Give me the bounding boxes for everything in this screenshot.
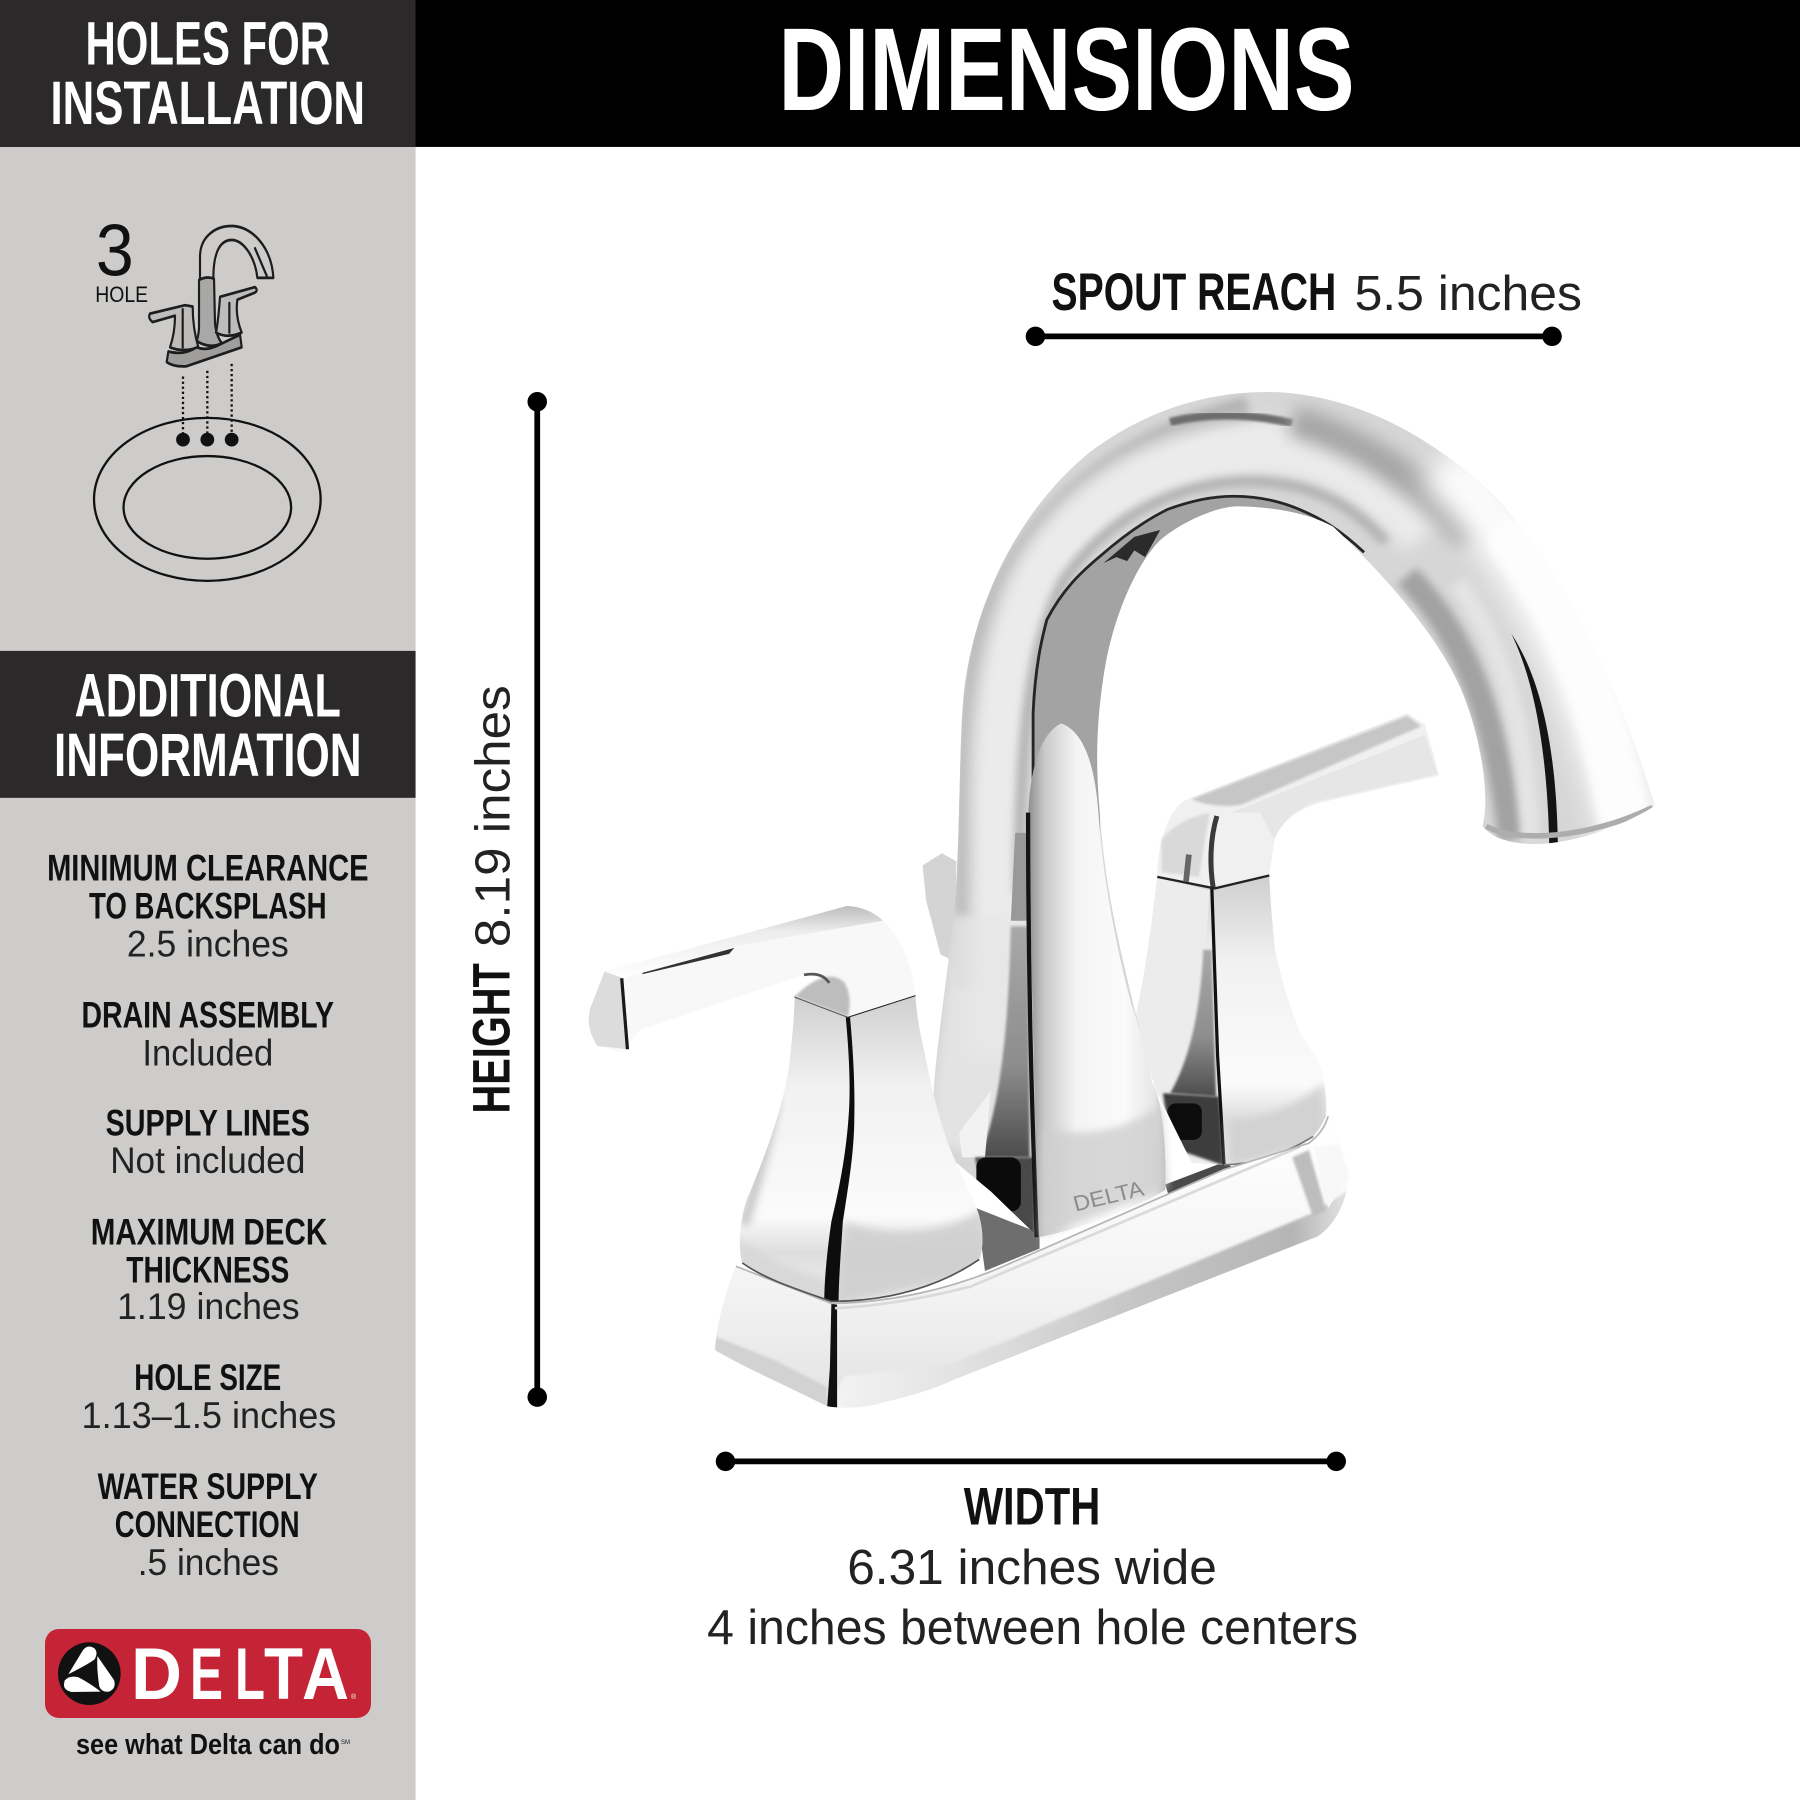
bright outer side of spout end <box>1443 461 1637 853</box>
center teardrop front <box>1028 723 1165 1237</box>
logo wordmark: D <box>131 1634 182 1715</box>
header bar: dimensions <box>0 0 1800 147</box>
dimension: width: 6.31 inches wide <box>847 1540 1217 1595</box>
logo wordmark <box>131 1634 349 1715</box>
spec: maximum deck thickness: 1.19 inches <box>117 1286 300 1327</box>
logo wordmark: T <box>264 1634 303 1715</box>
dimension: width: WIDTH <box>964 1477 1100 1536</box>
heading: holes for installation: HOLES FOR <box>86 9 330 77</box>
deck base plate <box>711 1116 1357 1414</box>
logo wordmark: A <box>302 1634 349 1715</box>
top streak <box>1170 415 1292 423</box>
grey shadow beside the dark curve <box>1019 481 1386 894</box>
back lever behind the spout <box>923 853 956 961</box>
title: DIMENSIONS: DIMENSIONS <box>778 4 1355 136</box>
logo emblem <box>58 1642 121 1705</box>
icon: faucet line drawing <box>149 226 273 366</box>
logo red badge <box>45 1629 371 1718</box>
spec: water supply connection: .5 inches <box>138 1542 279 1583</box>
spec: maximum deck thickness: THICKNESS <box>126 1249 289 1290</box>
dark reflection line on spout end <box>1511 633 1558 845</box>
spec: supply lines <box>106 1102 310 1181</box>
dimension: width: 4 inches between hole centers <box>707 1600 1358 1655</box>
engraved DELTA mark: DELTA <box>1070 1176 1146 1216</box>
logo wordmark: L <box>235 1634 265 1715</box>
three mounting holes <box>176 433 239 447</box>
spec: maximum deck thickness: MAXIMUM DECK <box>91 1211 328 1252</box>
spec: hole size <box>82 1357 336 1436</box>
right lever <box>1157 713 1439 888</box>
tagline: see what Delta can do <box>76 1729 340 1761</box>
label: 3 hole: HOLE <box>95 282 148 307</box>
sink basin <box>94 418 321 581</box>
dimension: height: HEIGHT <box>463 963 522 1114</box>
left lever <box>589 906 915 1053</box>
outer darker band of the tube <box>971 410 1249 988</box>
registered mark: ® <box>351 1693 357 1701</box>
label: 3 hole: 3 <box>96 209 134 292</box>
dimension: height: 8.19 inches <box>466 685 521 947</box>
wide highlight along the tube <box>998 448 1429 1056</box>
grey band under the arch <box>1034 498 1334 831</box>
spec: drain assembly: Included <box>142 1032 273 1073</box>
Delta logo <box>45 1629 371 1761</box>
spec: minimum clearance: MINIMUM CLEARANCE <box>47 847 368 888</box>
spec: hole size: 1.13–1.5 inches <box>82 1395 336 1436</box>
dimension: height <box>463 392 547 1407</box>
chrome faucet illustration <box>589 392 1655 1414</box>
spec: supply lines: SUPPLY LINES <box>106 1102 310 1143</box>
heading: holes for installation: INSTALLATION <box>51 69 365 137</box>
dimension: spout reach: SPOUT REACH <box>1052 263 1336 322</box>
heading: additional information: ADDITIONAL <box>75 661 341 729</box>
spec: minimum clearance <box>47 847 368 964</box>
main column and arched spout <box>933 392 1655 1237</box>
spec: drain assembly: DRAIN ASSEMBLY <box>82 994 334 1035</box>
spec: water supply connection: WATER SUPPLY <box>98 1466 318 1507</box>
spec: supply lines: Not included <box>110 1140 305 1181</box>
dimension: spout reach: 5.5 inches <box>1355 266 1582 321</box>
left body under the tube <box>936 912 1001 1149</box>
heading: holes for installation <box>0 0 416 147</box>
left handle body <box>739 995 988 1306</box>
heading: additional information <box>0 651 416 798</box>
dimension: width <box>707 1452 1358 1655</box>
spec: water supply connection <box>98 1466 318 1583</box>
spec: hole size: HOLE SIZE <box>134 1357 281 1398</box>
spec: drain assembly <box>82 994 334 1073</box>
right handle body <box>1134 876 1326 1168</box>
icon: 3 hole faucet over sink <box>94 209 321 581</box>
dimension: spout reach <box>1026 263 1582 346</box>
spec: minimum clearance: 2.5 inches <box>127 923 289 964</box>
logo wordmark: E <box>190 1634 223 1715</box>
sidebar panel <box>0 147 416 1800</box>
spec: water supply connection: CONNECTION <box>115 1504 300 1545</box>
spec: minimum clearance: TO BACKSPLASH <box>89 885 327 926</box>
dotted drop lines <box>183 364 232 440</box>
label: 3 hole <box>95 209 148 307</box>
spec: maximum deck thickness <box>91 1211 328 1327</box>
dark recess behind the handles <box>976 1161 1235 1271</box>
service mark: SM <box>341 1740 350 1746</box>
heading: additional information: INFORMATION <box>54 721 362 789</box>
grey inner side of spout end <box>1407 576 1511 840</box>
